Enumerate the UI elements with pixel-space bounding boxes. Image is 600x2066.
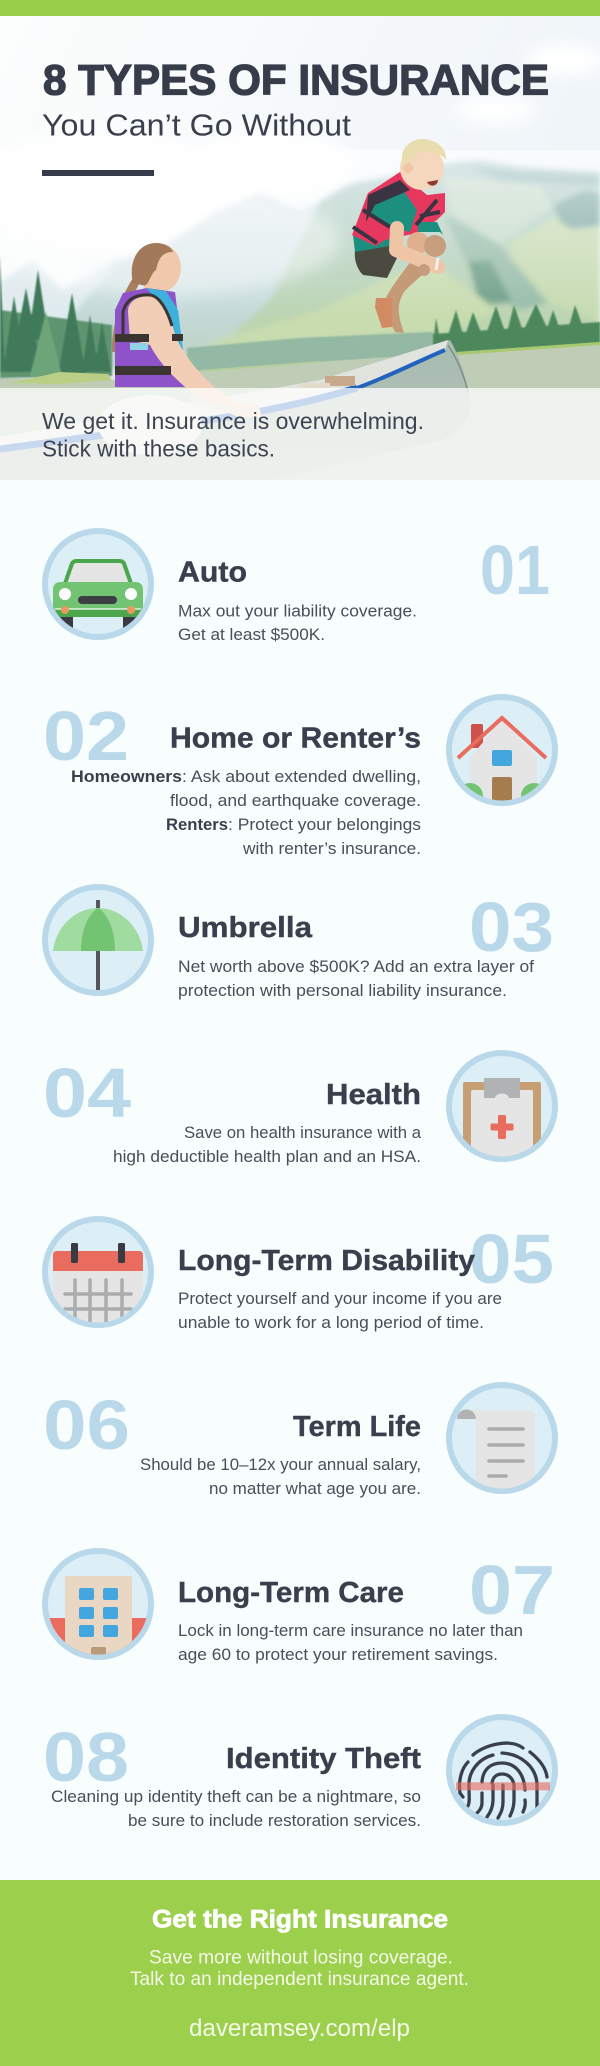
icon: calendar bbox=[45, 1219, 151, 1331]
canoe bbox=[364, 340, 468, 388]
heading: Long-Term Disability bbox=[178, 1245, 475, 1277]
number: 04 bbox=[43, 1054, 131, 1132]
top green bar bbox=[0, 0, 600, 16]
body text: Save on health insurance with a bbox=[184, 1123, 422, 1142]
heading: Health bbox=[326, 1079, 421, 1111]
light wash over the mountains bbox=[196, 150, 600, 301]
footer text: Talk to an independent insurance agent. bbox=[130, 1969, 469, 1990]
heading: Identity Theft bbox=[226, 1743, 421, 1775]
panel: 04 health bbox=[43, 1053, 555, 1166]
body text: high deductible health plan and an HSA. bbox=[113, 1147, 421, 1166]
footer text bbox=[130, 1948, 469, 1990]
title rule bbox=[42, 170, 154, 176]
number: 08 bbox=[43, 1718, 129, 1796]
number: 01 bbox=[480, 531, 550, 609]
icon: umbrella bbox=[45, 887, 151, 993]
body text: Should be 10–12x your annual salary, bbox=[140, 1455, 421, 1474]
footer text: Save more without losing coverage. bbox=[149, 1948, 453, 1968]
icon: care building bbox=[45, 1551, 151, 1660]
title: 8 TYPES OF INSURANCE bbox=[43, 56, 549, 104]
body text: Max out your liability coverage. bbox=[178, 602, 417, 620]
boy bbox=[352, 139, 446, 333]
woman bbox=[98, 243, 262, 455]
body text: with renter’s insurance. bbox=[242, 839, 421, 858]
heading: Long-Term Care bbox=[178, 1577, 404, 1609]
panel: 03 umbrella bbox=[45, 887, 554, 1000]
body text: Cleaning up identity theft can be a nightmare, so bbox=[51, 1787, 421, 1806]
panel: 05 long-term disability bbox=[45, 1219, 554, 1332]
body text bbox=[71, 767, 421, 858]
number: 03 bbox=[469, 888, 554, 966]
body text bbox=[140, 1455, 421, 1498]
body text: flood, and earthquake coverage. bbox=[170, 791, 421, 810]
panel: 07 long-term care bbox=[45, 1551, 555, 1664]
icon: clipboard bbox=[449, 1053, 555, 1162]
body text: protection with personal liability insurance. bbox=[178, 981, 507, 1000]
footer url: daveramsey.com/elp bbox=[189, 2015, 410, 2042]
body text bbox=[178, 1289, 502, 1332]
panel: 06 term life bbox=[43, 1385, 555, 1498]
panel: 08 identity theft bbox=[43, 1717, 555, 1830]
icon: car bbox=[45, 531, 151, 637]
body text: unable to work for a long period of time. bbox=[178, 1313, 484, 1332]
body text bbox=[113, 1123, 422, 1166]
footer heading: Get the Right Insurance bbox=[152, 1906, 448, 1934]
body text: Protect yourself and your income if you are bbox=[178, 1289, 502, 1308]
heading: Auto bbox=[178, 556, 247, 588]
intro text: Stick with these basics. bbox=[42, 436, 275, 462]
body text bbox=[178, 602, 417, 644]
body text: Get at least $500K. bbox=[178, 625, 325, 644]
body text bbox=[51, 1787, 421, 1830]
icon: house bbox=[449, 697, 555, 810]
icon: policy document bbox=[449, 1385, 555, 1498]
number: 05 bbox=[469, 1220, 554, 1298]
body text: : Protect your belongings bbox=[228, 815, 421, 834]
body text bbox=[178, 1621, 523, 1664]
body text: no matter what age you are. bbox=[209, 1479, 421, 1498]
heading: Umbrella bbox=[178, 912, 313, 944]
number: 07 bbox=[469, 1551, 555, 1629]
body text: be sure to include restoration services. bbox=[128, 1811, 421, 1830]
heading: Home or Renter’s bbox=[170, 722, 421, 754]
body text: Lock in long-term care insurance no later than bbox=[178, 1621, 523, 1640]
heading: Term Life bbox=[293, 1411, 421, 1443]
intro text: We get it. Insurance is overwhelming. bbox=[42, 408, 424, 434]
panel: 01 auto bbox=[45, 531, 550, 644]
body text: Net worth above $500K? Add an extra layer of bbox=[178, 957, 534, 976]
intro text bbox=[42, 408, 424, 462]
body text: Homeowners bbox=[71, 767, 182, 786]
subtitle: You Can’t Go Without bbox=[42, 108, 351, 142]
intro band: translucent overlay bbox=[0, 388, 600, 480]
hero photo: mother and jumping boy on a canoe bbox=[0, 83, 600, 480]
body text: age 60 to protect your retirement savings. bbox=[178, 1645, 498, 1664]
body text: Renters bbox=[166, 815, 228, 834]
number: 06 bbox=[43, 1386, 130, 1464]
panel: 02 home or renter's bbox=[43, 697, 555, 858]
body text: : Ask about extended dwelling, bbox=[182, 767, 421, 786]
icon: fingerprint bbox=[449, 1717, 555, 1823]
number: 02 bbox=[43, 697, 129, 775]
panel: footer call to action bbox=[0, 1880, 600, 2066]
body text bbox=[178, 957, 534, 1000]
